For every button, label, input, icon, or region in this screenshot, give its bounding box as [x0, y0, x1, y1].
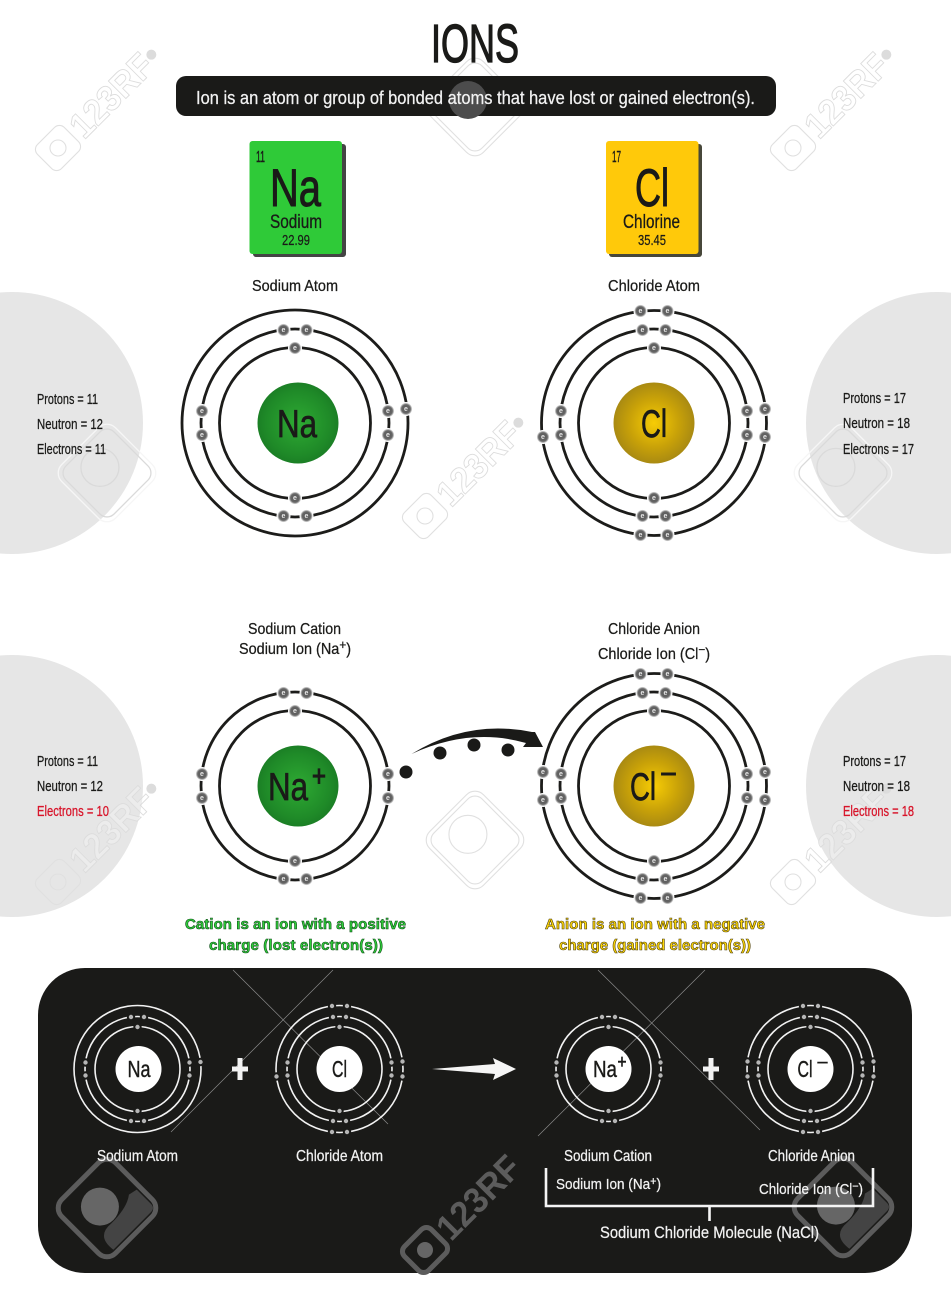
atom icon: chloride anion: − [816, 1053, 828, 1074]
watermark: logo middle left [30, 771, 170, 910]
watermark: logo centre: 123RF [428, 413, 529, 514]
stats: chloride anion: Electrons = 18 [843, 804, 914, 820]
atom diagram: chlorine atom: eeeeeeeeeeeeeeeee [541, 308, 767, 539]
stats: chlorine atom: Electrons = 17 [843, 442, 914, 458]
watermark: logo top right [765, 37, 905, 176]
element card: chlorine: 35.45 [638, 232, 666, 249]
stats: sodium atom: Protons = 11 [37, 392, 98, 408]
panel: grey semicircle middle left [0, 655, 143, 917]
label: chloride anion: ) [705, 646, 710, 663]
watermark: logo middle right: 123RF [796, 779, 897, 880]
label: chloride anion [598, 621, 710, 663]
stats: sodium cation: Protons = 11 [37, 754, 98, 770]
atom diagram: sodium cation: + [312, 760, 326, 793]
arrow: reaction [432, 1058, 516, 1080]
atom diagram: chloride anion: eeeeeeeeeeeeeeeeee [541, 671, 767, 902]
element card: sodium: Sodium [270, 212, 322, 233]
label: panel sodium ion: Sodium Ion (Na [556, 1176, 660, 1193]
label: sodium cation: ) [346, 641, 351, 658]
atom icon: chloride anion: Cl [798, 1056, 812, 1082]
callout: anion definition [545, 916, 765, 954]
panel: grey semicircle middle right [806, 655, 951, 917]
watermark: logo top left: 123RF [61, 45, 162, 146]
label: sodium chloride molecule: Sodium Chloride Molecule (NaCl) [600, 1223, 819, 1242]
atom icon: chlorine atom: Cl [332, 1056, 347, 1082]
label: panel chloride ion: ) [859, 1181, 863, 1198]
stats: sodium cation: Neutron = 12 [37, 779, 103, 795]
element card: sodium [250, 141, 346, 257]
label: panel sodium ion: ) [656, 1176, 661, 1193]
element card: chlorine [606, 141, 702, 257]
bracket: sodium chloride molecule [546, 1168, 873, 1221]
stats: sodium cation: Electrons = 10 [37, 804, 109, 820]
atom diagram: chlorine atom: Cl [641, 403, 667, 446]
label: panel chloride anion: Chloride Anion [768, 1148, 855, 1165]
atom diagram: sodium atom: eeeeeeeeeee [200, 327, 408, 520]
watermark: logo middle right [765, 771, 905, 910]
label: chloride atom: Chloride Atom [608, 278, 700, 295]
atom diagram: sodium cation: Na [268, 766, 308, 809]
callout: cation definition: charge (lost electron(s)) [209, 937, 383, 954]
atom icon: sodium cation: Na [593, 1056, 617, 1082]
label: sodium cation: + [339, 637, 346, 652]
stats: chlorine atom: Neutron = 18 [843, 416, 910, 432]
watermark: logo middle left: 123RF [61, 779, 162, 880]
element card: chlorine: Chlorine [623, 212, 680, 233]
watermark: panel decorations: 123RF [428, 1147, 529, 1248]
stats: chloride anion: Neutron = 18 [843, 779, 910, 795]
banner: definition: Ion is an atom or group of bonded atoms that have lost or gained electron(s). [196, 87, 755, 108]
atom diagram: sodium cation: eeeeeeeeee [200, 690, 390, 883]
atom icon: chloride anion [744, 1003, 877, 1135]
panel: ionic bonding summary [38, 968, 912, 1278]
callout: cation definition: Cation is an ion with a positive [185, 916, 406, 933]
element card: sodium: 11 [256, 149, 265, 166]
label: panel sodium cation: Sodium Cation [564, 1148, 652, 1165]
atom icon: sodium atom: Na [128, 1056, 151, 1082]
atom icon: sodium cation: + [618, 1052, 626, 1073]
atom icon: sodium atom [74, 1006, 204, 1132]
label: sodium cation: Sodium Ion (Na [239, 641, 350, 658]
watermark: egg right [789, 419, 897, 527]
atom diagram: chloride anion: Cl [630, 766, 656, 809]
stats: sodium atom: Neutron = 12 [37, 417, 103, 433]
element card: chlorine: 17 [612, 149, 621, 166]
callout: anion definition: charge (gained electron(s)) [559, 937, 751, 954]
stats: sodium atom [37, 392, 106, 458]
watermark: logo top right: 123RF [796, 45, 897, 146]
atom diagram: chloride anion: − [660, 758, 677, 791]
label: chloride anion: Chloride Anion [608, 621, 700, 638]
label: chloride anion: Chloride Ion (Cl [598, 646, 709, 663]
stats: chloride anion: Protons = 17 [843, 754, 906, 770]
element card: sodium: Na [270, 159, 321, 218]
atom diagram: sodium atom: Na [277, 403, 317, 446]
label: panel chloride ion: − [852, 1179, 859, 1193]
stats: chloride anion [843, 754, 914, 820]
label: sodium cation: Sodium Cation [248, 621, 341, 638]
watermark: egg left [53, 419, 161, 527]
watermark: logo centre [397, 405, 537, 544]
label: chloride anion: − [698, 642, 705, 657]
panel: grey semicircle top left [0, 292, 143, 554]
stats: chlorine atom: Protons = 17 [843, 391, 906, 407]
label: panel sodium atom: Sodium Atom [97, 1148, 178, 1165]
element card: chlorine: Cl [635, 159, 669, 218]
label: sodium cation [239, 621, 351, 658]
label: sodium atom: Sodium Atom [252, 278, 338, 295]
label: panel sodium ion: + [650, 1174, 656, 1188]
callout: anion definition: Anion is an ion with a negative [545, 916, 765, 933]
label: panel chloride atom: Chloride Atom [296, 1148, 383, 1165]
icon: plus left [232, 1058, 248, 1080]
label: panel chloride ion: Chloride Ion (Cl [759, 1181, 863, 1198]
panel: grey semicircle top right [806, 292, 951, 554]
stats: sodium cation [37, 754, 109, 820]
watermark: egg top [421, 53, 529, 161]
stats: chlorine atom [843, 391, 914, 458]
atom icon: chlorine atom [273, 1003, 406, 1135]
callout: cation definition [185, 916, 406, 954]
banner: definition [176, 76, 776, 119]
watermark: logo top left [30, 37, 170, 176]
watermark: egg centre [421, 786, 529, 894]
atom icon: sodium cation [553, 1014, 664, 1124]
arrow: electron transfer [400, 728, 543, 778]
watermark: panel decorations [53, 970, 897, 1278]
stats: sodium atom: Electrons = 11 [37, 442, 106, 458]
icon: plus right [703, 1058, 719, 1080]
title: IONS [431, 14, 519, 74]
element card: sodium: 22.99 [282, 232, 310, 249]
